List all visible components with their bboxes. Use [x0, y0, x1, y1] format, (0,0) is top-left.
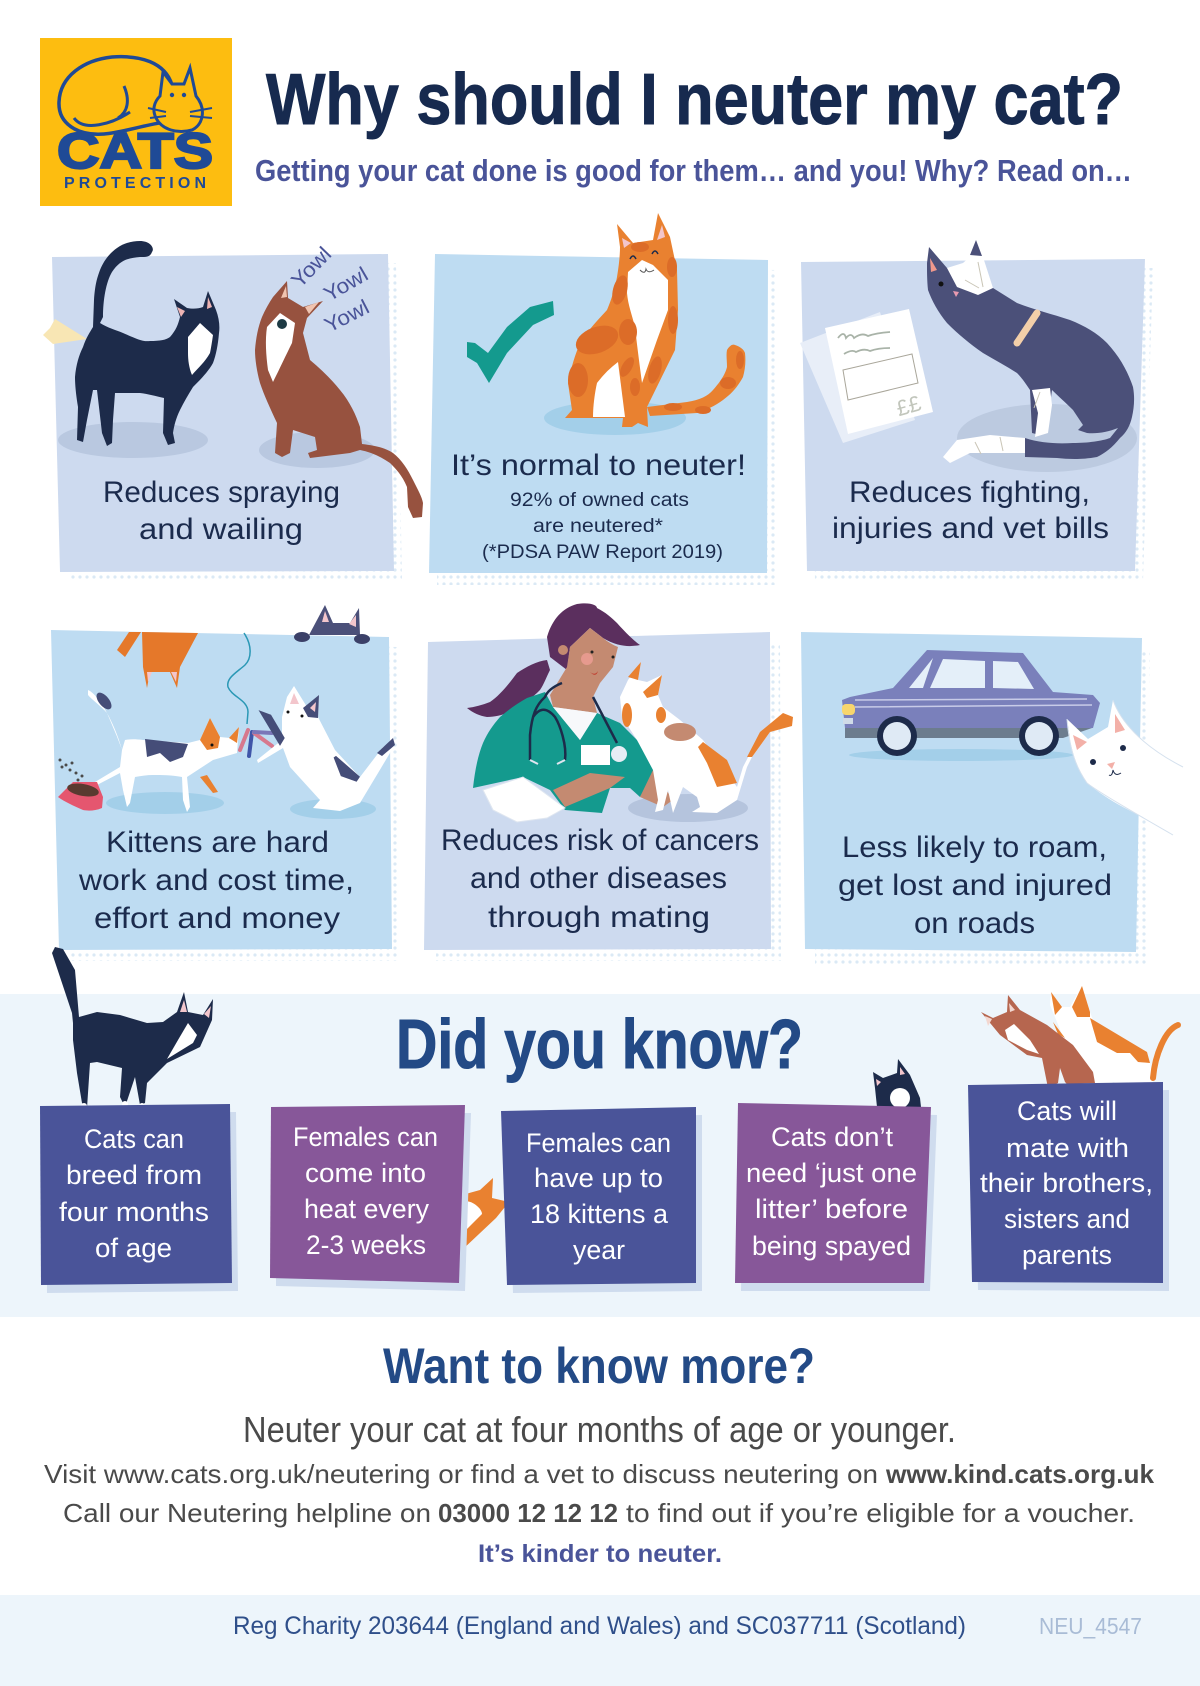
black cat spraying: [43, 241, 219, 458]
caption: Reduces spraying: [103, 476, 340, 509]
vet ponytail: [467, 660, 550, 717]
logo: Cats Protection: PROTECTION: [64, 175, 208, 192]
brown cat wailing: [255, 281, 423, 518]
caption: [103, 476, 340, 546]
Yowl text: Yowl: [320, 263, 372, 306]
vet face and neck: [550, 628, 618, 713]
box: 18 kittens a year: year: [573, 1235, 625, 1265]
panel: reduces fighting: [800, 240, 1153, 581]
white cat: [620, 662, 793, 813]
box: breed from four months: breed from: [66, 1160, 202, 1190]
Yowl text: Yowl: [287, 243, 336, 292]
visit line: Visit www.cats.org.uk/neutering or find a vet to discuss neutering on: [44, 1459, 878, 1489]
footer band: [0, 1595, 1200, 1686]
box: breed from four months: Cats can: [84, 1124, 184, 1154]
caption: [451, 449, 746, 563]
box: just one litter: being spayed: [752, 1231, 911, 1261]
box: heat every 2-3 weeks: 2-3 weeks: [306, 1230, 426, 1260]
helpline line: 03000 12 12 12: [438, 1498, 618, 1528]
two cats on box: [981, 986, 1178, 1090]
hand on cat: [664, 723, 696, 741]
box: just one litter: Cats don’t: [771, 1122, 893, 1152]
heading: did you know: Did you know?: [396, 1005, 803, 1083]
panel: reduces risk of cancers: [424, 603, 793, 961]
black cat on box: [52, 947, 213, 1109]
box: just one litter: need ‘just one: [746, 1158, 917, 1188]
box: breed from four months: [40, 1104, 238, 1293]
Yowl text: [287, 243, 373, 337]
caption: are neutered*: [533, 516, 664, 537]
box: just one litter: [735, 1103, 937, 1291]
box: brothers sisters parents: parents: [1022, 1240, 1112, 1270]
peeking blue cat: [294, 605, 370, 644]
scrubs: [473, 692, 655, 813]
caption: and wailing: [139, 513, 303, 546]
box: 18 kittens a year: [501, 1107, 702, 1293]
box: brothers sisters parents: sisters and: [1004, 1204, 1130, 1234]
caption: It’s normal to neuter!: [451, 449, 746, 482]
section: did you know band: [0, 947, 1200, 1317]
bandaged dark cat: [927, 240, 1137, 472]
caption: 92% of owned cats: [510, 490, 689, 511]
caption: through mating: [488, 901, 710, 934]
tagline: It’s kinder to neuter.: [478, 1540, 722, 1568]
hanging orange cat: [117, 632, 198, 688]
caption: injuries and vet bills: [832, 512, 1109, 545]
box: 18 kittens a year: have up to: [534, 1163, 663, 1193]
box: breed from four months: four months: [59, 1197, 209, 1227]
box: 18 kittens a year: Females can: [526, 1128, 671, 1158]
car: [842, 650, 1100, 761]
charity registration: Reg Charity 203644 (England and Wales) and SC037711 (Scotland): [233, 1612, 966, 1640]
vet bills paper: ££: [893, 390, 924, 421]
box: just one litter: litter’ before: [755, 1194, 908, 1224]
caption: [838, 831, 1112, 940]
logo: Cats Protection: CATS: [57, 123, 213, 179]
panel: normal to neuter: [429, 213, 776, 585]
vet hair: [547, 603, 640, 670]
stethoscope: [530, 683, 617, 760]
visit line: www.kind.cats.org.uk: [885, 1459, 1155, 1489]
white cat in front: [1067, 700, 1183, 835]
box: heat every 2-3 weeks: heat every: [304, 1194, 429, 1224]
orange cat peeking: [459, 1178, 509, 1250]
helpline line: to find out if you’re eligible for a voucher.: [626, 1498, 1135, 1528]
call to action text: Neuter your cat at four months of age or younger.: [243, 1409, 956, 1450]
vet with cat: [467, 603, 793, 822]
reference code: NEU_4547: [1039, 1613, 1142, 1639]
caption: [832, 476, 1109, 545]
black cat peeking: [873, 1059, 921, 1108]
box: brothers sisters parents: mate with: [1006, 1133, 1129, 1163]
box: brothers sisters parents: Cats will: [1017, 1096, 1117, 1126]
caption: on roads: [914, 907, 1035, 940]
sleeve: [483, 777, 565, 822]
panel: reduces spraying and wailing: [43, 241, 423, 582]
caption: [441, 824, 759, 934]
check mark: [467, 301, 554, 383]
box: brothers sisters parents: [968, 1082, 1169, 1291]
orange cat: [544, 213, 745, 435]
caption: and other diseases: [470, 862, 727, 895]
helpline line: [63, 1498, 1135, 1528]
panel: kittens are hard work: [51, 605, 400, 961]
kitten with toy: [257, 686, 395, 819]
caption: (*PDSA PAW Report 2019): [482, 542, 723, 563]
box: brothers sisters parents: their brothers,: [980, 1168, 1153, 1198]
heading: want to know more: Want to know more?: [383, 1338, 815, 1394]
panel: less likely to roam: [801, 632, 1183, 966]
feathers: [240, 730, 272, 756]
food bowl: [58, 782, 103, 811]
wheels: [877, 716, 1059, 756]
caption: Reduces fighting,: [849, 476, 1090, 509]
arms: [553, 773, 625, 807]
caption: [78, 826, 354, 935]
caption: Less likely to roam,: [842, 831, 1107, 864]
toy string: [228, 633, 250, 724]
caption: Reduces risk of cancers: [441, 824, 759, 857]
section: want to know more: [44, 1338, 1155, 1568]
helpline line: Call our Neutering helpline on: [63, 1498, 431, 1528]
kitten with food bowl: [58, 690, 239, 814]
box: heat every 2-3 weeks: Females can: [293, 1122, 438, 1152]
caption: work and cost time,: [78, 864, 354, 897]
vet bills paper: [800, 309, 933, 443]
box: heat every 2-3 weeks: come into: [305, 1158, 426, 1188]
box: breed from four months: of age: [95, 1233, 172, 1263]
logo: Cats Protection: [40, 38, 232, 206]
box: heat every 2-3 weeks: [270, 1105, 471, 1291]
caption: Kittens are hard: [106, 826, 329, 859]
caption: effort and money: [94, 902, 340, 935]
caption: get lost and injured: [838, 869, 1112, 902]
box: 18 kittens a year: 18 kittens a: [530, 1199, 669, 1229]
Yowl text: Yowl: [321, 296, 373, 337]
